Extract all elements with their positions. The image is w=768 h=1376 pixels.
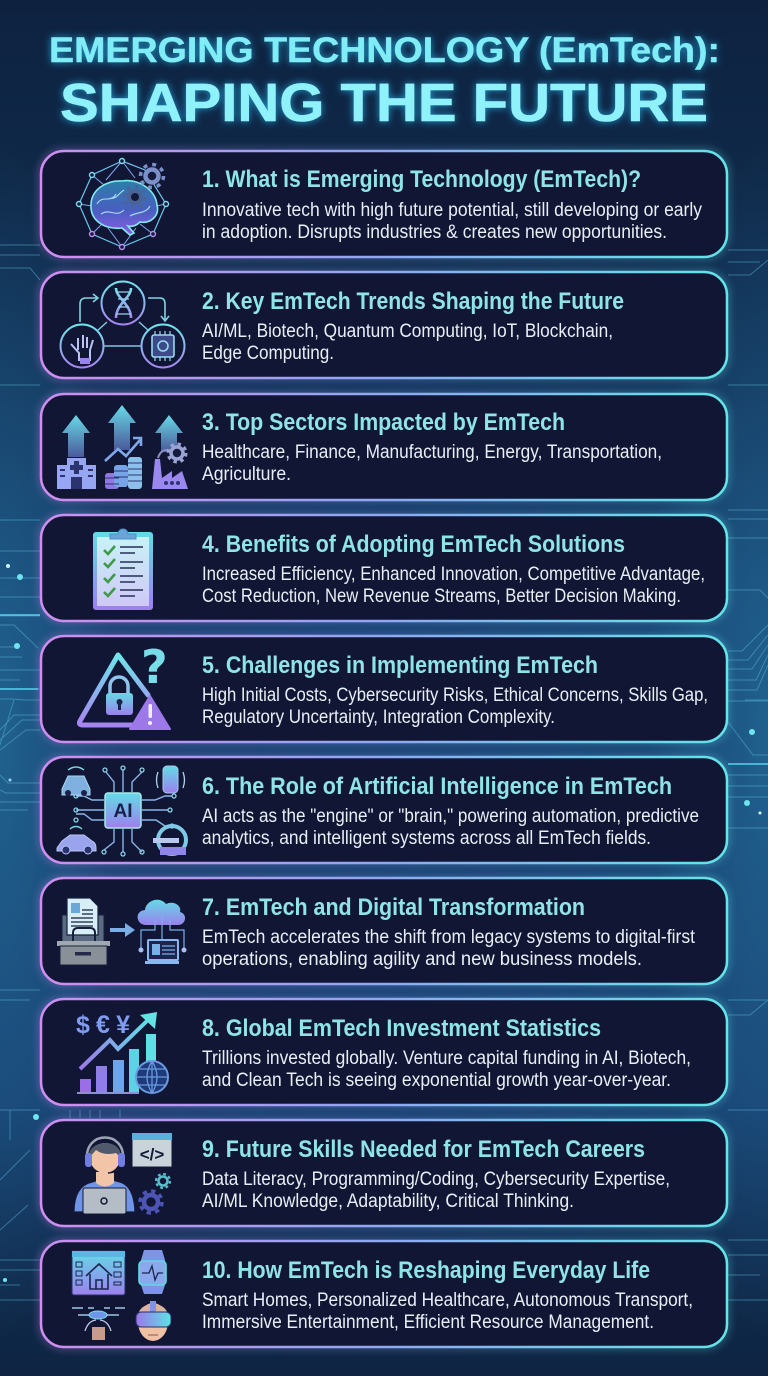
- description: Immersive Entertainment, Efficient Resource Management.: [202, 1312, 654, 1333]
- description: AI/ML, Biotech, Quantum Computing, IoT, Blockchain,: [202, 321, 613, 342]
- title: [49, 31, 720, 133]
- description: analytics, and intelligent systems across all EmTech fields.: [202, 828, 651, 849]
- icon: legacy file tray to cloud laptop: [57, 898, 186, 965]
- icon: person at laptop with code window and gears: </>: [140, 1145, 164, 1164]
- description: AI/ML Knowledge, Adaptability, Critical Thinking.: [202, 1191, 574, 1212]
- heading: 1. What is Emerging Technology (EmTech)?: [202, 166, 641, 193]
- icon: smart home, smartwatch, drone and VR headset: [72, 1250, 171, 1341]
- panel 6: role of AI: [41, 757, 727, 863]
- description: Data Literacy, Programming/Coding, Cybersecurity Expertise,: [202, 1169, 670, 1190]
- icon: currency symbols, growth chart and globe: [76, 1011, 168, 1094]
- description: [202, 1290, 693, 1333]
- heading: 5. Challenges in Implementing EmTech: [202, 652, 598, 679]
- description: [202, 321, 613, 364]
- circuit traces left and right: [0, 245, 768, 1300]
- panel 10: everyday life: [41, 1241, 727, 1347]
- icon: AI chip with connected devices: [57, 766, 186, 856]
- heading: 3. Top Sectors Impacted by EmTech: [202, 409, 565, 436]
- description: Trillions invested globally. Venture capital funding in AI, Biotech,: [202, 1048, 691, 1069]
- description: Smart Homes, Personalized Healthcare, Autonomous Transport,: [202, 1290, 693, 1311]
- panel 1: what is EmTech: [41, 151, 727, 257]
- description: Increased Efficiency, Enhanced Innovation, Competitive Advantage,: [202, 564, 705, 585]
- description: AI acts as the "engine" or "brain," powering automation, predictive: [202, 806, 699, 827]
- heading: 9. Future Skills Needed for EmTech Careers: [202, 1136, 645, 1163]
- icon: warning triangle with lock: [79, 640, 170, 729]
- heading: 8. Global EmTech Investment Statistics: [202, 1015, 601, 1042]
- heading: 10. How EmTech is Reshaping Everyday Life: [202, 1257, 650, 1284]
- description: EmTech accelerates the shift from legacy systems to digital-first: [202, 927, 696, 948]
- description: High Initial Costs, Cybersecurity Risks, Ethical Concerns, Skills Gap,: [202, 685, 708, 706]
- description: [202, 1048, 691, 1091]
- heading: 6. The Role of Artificial Intelligence in EmTech: [202, 773, 672, 800]
- heading: 2. Key EmTech Trends Shaping the Future: [202, 288, 624, 315]
- description: [202, 442, 662, 485]
- icon: sector arrows, hospital, coins, factory: [57, 405, 188, 489]
- title line 2: SHAPING THE FUTURE: [60, 73, 708, 133]
- panel 3: top sectors: [41, 394, 727, 500]
- icon: warning triangle with lock: ?: [141, 640, 168, 694]
- icon: clipboard checklist: [93, 529, 153, 610]
- icon: AI chip with connected devices: AI: [114, 801, 132, 822]
- panel 7: digital transformation: [41, 878, 727, 984]
- icon: brain with gears in network: [76, 158, 168, 250]
- description: and Clean Tech is seeing exponential growth year-over-year.: [202, 1070, 671, 1091]
- description: [202, 806, 699, 849]
- panel 4: benefits: [41, 515, 727, 621]
- description: [202, 1169, 670, 1212]
- description: [202, 927, 696, 970]
- heading: 4. Benefits of Adopting EmTech Solutions: [202, 531, 625, 558]
- icon: biotech, robot hand and chip network: [60, 282, 184, 368]
- icon: currency symbols, growth chart and globe: $€¥: [76, 1011, 130, 1039]
- description: [202, 685, 708, 728]
- description: Cost Reduction, New Revenue Streams, Better Decision Making.: [202, 586, 681, 607]
- icon: person at laptop with code window and gears: [74, 1133, 172, 1214]
- description: operations, enabling agility and new business models.: [202, 949, 642, 970]
- title line 1: EMERGING TECHNOLOGY (EmTech):: [49, 31, 720, 70]
- description: Healthcare, Finance, Manufacturing, Energy, Transportation,: [202, 442, 662, 463]
- heading: 7. EmTech and Digital Transformation: [202, 894, 585, 921]
- panel 2: key trends: [41, 272, 727, 378]
- description: in adoption. Disrupts industries & creates new opportunities.: [202, 222, 667, 243]
- description: Agriculture.: [202, 464, 291, 485]
- description: Edge Computing.: [202, 343, 334, 364]
- panel 5: challenges: [41, 636, 727, 742]
- description: Innovative tech with high future potential, still developing or early: [202, 200, 702, 221]
- panel 9: future skills: [41, 1120, 727, 1226]
- description: [202, 564, 705, 607]
- description: Regulatory Uncertainty, Integration Complexity.: [202, 707, 555, 728]
- description: [202, 200, 702, 243]
- panel 8: investment statistics: [41, 999, 727, 1105]
